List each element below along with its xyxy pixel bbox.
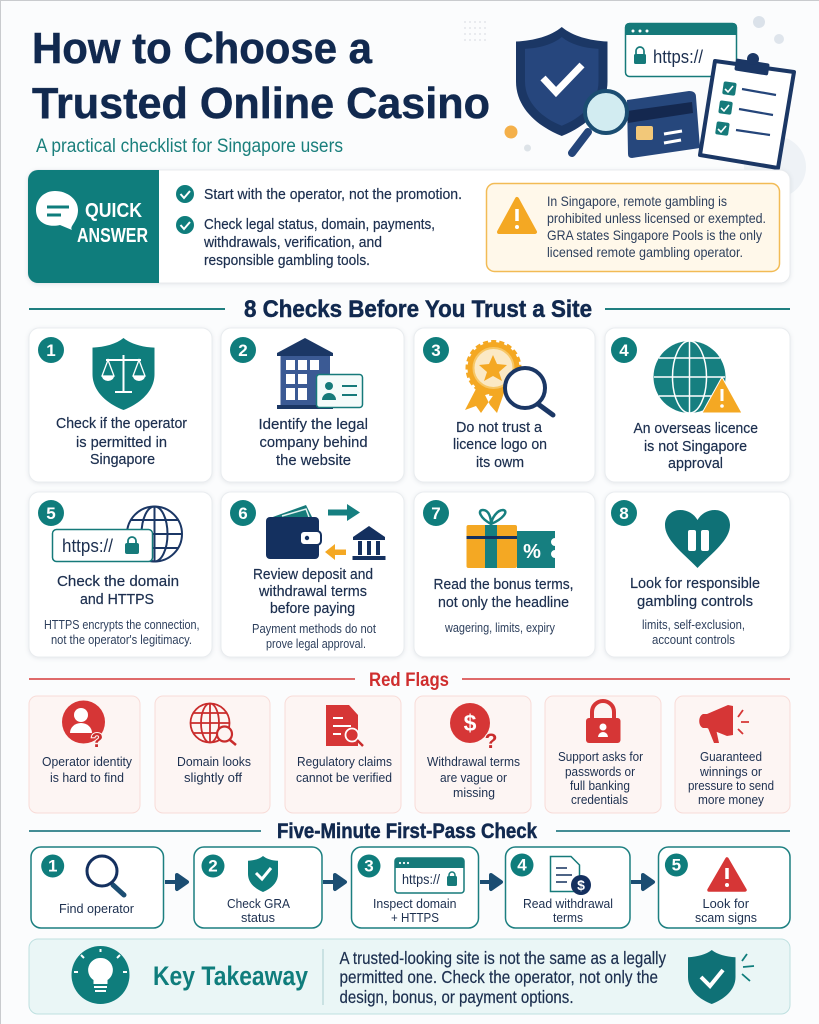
- panel: flag regulatory claims: Regulatory claims: [297, 754, 392, 769]
- panel: check 4: is not Singapore: [644, 438, 747, 455]
- step 2: check GRA status: status: [241, 910, 275, 925]
- step 4: read withdrawal terms: 4: [517, 856, 527, 874]
- panel: check 6: [221, 492, 404, 657]
- panel: flag support asks: [545, 696, 661, 813]
- icon: heart with pause: [665, 510, 730, 568]
- arrow 2: [323, 875, 345, 889]
- panel: quick answer: [28, 170, 790, 283]
- icon: person question: ?: [91, 730, 103, 752]
- panel: check 3: [414, 328, 595, 482]
- icon: rosette and magnifier: [465, 342, 553, 415]
- panel: check 5: HTTPS encrypts the connection,: [44, 618, 200, 632]
- panel: check 3: its owm: [476, 454, 524, 471]
- panel: flag domain: slightly off: [184, 770, 242, 785]
- checklist: withdrawals, verification, and: [203, 234, 382, 251]
- badge 7: 7: [431, 504, 441, 523]
- panel: check 1: is permitted in: [76, 434, 167, 451]
- panel: flag withdrawal terms: are vague or: [440, 770, 508, 785]
- panel: check 8: account controls: [652, 633, 735, 647]
- icon: padlock: [586, 701, 620, 743]
- panel: check 8: [605, 492, 790, 657]
- icon: building and ID card: [277, 338, 362, 409]
- key takeaway heading: Key Takeaway: [153, 961, 308, 991]
- panel: check 5: Check the domain: [57, 573, 179, 590]
- icon: megaphone: [699, 705, 749, 743]
- panel: check 1: Singapore: [90, 451, 155, 468]
- badge 2: 2: [238, 341, 248, 360]
- callout: legal warning: [486, 184, 780, 272]
- checklist: responsible gambling tools.: [204, 252, 370, 269]
- panel: check 7: not only the headline: [438, 594, 569, 611]
- step 5: scam signs: Look for: [702, 896, 750, 911]
- panel: flag support asks: full banking: [570, 778, 630, 793]
- panel: check 2: the website: [276, 452, 351, 469]
- panel: flag operator identity: Operator identity: [42, 754, 132, 769]
- panel: check 2: Identify the legal: [258, 416, 368, 433]
- badge 1: 1: [46, 341, 56, 360]
- panel: check 7: [414, 492, 595, 657]
- panel: flag withdrawal terms: Withdrawal terms: [427, 754, 520, 769]
- panel: flag withdrawal terms: [415, 696, 531, 813]
- takeaway text: design, bonus, or payment options.: [340, 987, 574, 1007]
- quick answer label: QUICK: [85, 200, 142, 222]
- icon: globe with warning: [654, 341, 742, 413]
- panel: check 6: Review deposit and: [253, 566, 373, 583]
- icon: shield with check: [516, 27, 608, 136]
- title: How to Choose a: [32, 24, 372, 73]
- checklist: Check legal status, domain, payments,: [204, 216, 435, 233]
- panel: flag guaranteed winnings: winnings or: [699, 764, 763, 779]
- icon: clipboard checklist: [700, 53, 794, 168]
- icon: shield check: [248, 856, 278, 892]
- panel: flag support asks: Support asks for: [558, 749, 644, 764]
- panel: check 2: company behind: [260, 434, 368, 451]
- badge 5: 5: [46, 504, 56, 523]
- badge 8: [611, 500, 637, 526]
- badge 5: [38, 500, 64, 526]
- step 3: inspect domain: 3: [364, 856, 374, 876]
- icon: https box and globe: https://: [62, 536, 113, 556]
- icon: dollar question: ?: [485, 730, 497, 753]
- panel: flag regulatory claims: cannot be verified: [296, 770, 392, 785]
- step 3: inspect domain: + HTTPS: [391, 910, 439, 925]
- heading: red flags: Red Flags: [369, 670, 449, 691]
- heading: 8 checks: 8 Checks Before You Trust a Site: [244, 296, 592, 323]
- arrow 1: [165, 875, 187, 889]
- icon: dollar question: [450, 703, 497, 753]
- panel: flag domain: [155, 696, 270, 813]
- panel: flag operator identity: [29, 696, 140, 813]
- badge 3: 3: [431, 341, 441, 360]
- step 2: check GRA status: [194, 847, 322, 928]
- badge 4: [611, 337, 637, 363]
- step 1: find operator: Find operator: [59, 901, 135, 916]
- badge 8: 8: [619, 504, 629, 523]
- takeaway text: A trusted-looking site is not the same as a legally: [340, 948, 666, 968]
- panel: check 5: not the operator's legitimacy.: [51, 633, 192, 647]
- icon: red warning triangle: [709, 859, 745, 890]
- panel: check 3: licence logo on: [453, 436, 547, 453]
- icon: lightbulb: [72, 946, 130, 1004]
- icon: wallet and bank transfer: [266, 504, 386, 560]
- step 3: inspect domain: [352, 847, 478, 928]
- callout: legal warning: In Singapore, remote gambling is: [547, 193, 727, 209]
- step 5: scam signs: 5: [672, 856, 681, 874]
- icon: credit card: [627, 91, 700, 158]
- quick answer label: ANSWER: [77, 225, 148, 247]
- checklist: [176, 185, 462, 269]
- panel: check 2: [221, 328, 404, 482]
- icon: dollar question: $: [464, 710, 477, 736]
- panel: flag regulatory claims: [285, 696, 401, 813]
- step 2: check GRA status: 2: [208, 856, 218, 876]
- callout: legal warning: prohibited unless licensed or exempted.: [547, 210, 766, 226]
- panel: check 8: Look for responsible: [630, 575, 760, 592]
- title: Trusted Online Casino: [32, 79, 490, 128]
- panel: check 5: [29, 492, 212, 657]
- panel: check 1: Check if the operator: [56, 415, 187, 432]
- badge 3: [423, 337, 449, 363]
- icon: browser https: https://: [402, 871, 440, 887]
- step 4: read withdrawal terms: terms: [553, 910, 583, 925]
- badge 6: 6: [238, 504, 248, 523]
- step 1: find operator: [31, 847, 164, 928]
- takeaway text: permitted one. Check the operator, not only the: [340, 967, 658, 987]
- step 5: scam signs: scam signs: [695, 910, 757, 925]
- arrow 3: [480, 875, 501, 889]
- panel: check 6: prove legal approval.: [266, 637, 366, 651]
- panel: flag operator identity: is hard to find: [50, 770, 124, 785]
- panel: flag support asks: passwords or: [565, 764, 636, 779]
- panel: check 4: approval: [668, 455, 723, 472]
- panel: flag withdrawal terms: missing: [453, 785, 495, 800]
- takeaway text: [340, 948, 666, 1007]
- heading: five-minute check: Five-Minute First-Pass Check: [277, 820, 537, 843]
- icon: magnifier: [87, 856, 124, 895]
- icon: globe magnifier: [190, 703, 236, 745]
- panel: flag guaranteed winnings: pressure to send: [688, 778, 774, 793]
- icon: document dollar: $: [577, 877, 585, 893]
- icon: gift and coupon: %: [523, 541, 541, 563]
- badge 6: [230, 500, 256, 526]
- panel: check 7: wagering, limits, expiry: [444, 621, 556, 635]
- panel: check 6: withdrawal terms: [258, 583, 367, 600]
- panel: flag support asks: credentials: [571, 792, 628, 807]
- panel: flag guaranteed winnings: more money: [698, 792, 764, 807]
- icon: browser https: https://: [653, 47, 703, 67]
- callout: legal warning: GRA states Singapore Pools is the only: [547, 227, 762, 243]
- icon: https box and globe: [52, 506, 182, 562]
- checklist: Start with the operator, not the promotion.: [204, 186, 462, 203]
- step 1: find operator: 1: [48, 856, 57, 876]
- icon: gift and coupon: [466, 510, 555, 568]
- panel: key takeaway: [29, 939, 790, 1014]
- header illustration: [464, 16, 806, 198]
- step 4: read withdrawal terms: [506, 847, 630, 928]
- icon: speech bubble: [36, 191, 78, 230]
- icon: shield check: [688, 950, 754, 1004]
- icon: document magnifier: [326, 705, 363, 746]
- quick answer label: [28, 170, 159, 283]
- icon: warning triangle: [499, 199, 535, 232]
- callout: legal warning: licensed remote gambling operator.: [547, 244, 743, 260]
- arrow 4: [631, 875, 653, 889]
- panel: check 3: Do not trust a: [456, 419, 543, 436]
- step 4: read withdrawal terms: Read withdrawal: [523, 896, 613, 911]
- step 5: scam signs: [658, 847, 790, 928]
- title: [32, 24, 490, 128]
- panel: check 1: [29, 328, 212, 482]
- badge 4: 4: [619, 341, 629, 360]
- panel: check 4: [605, 328, 790, 482]
- panel: check 4: An overseas licence: [634, 420, 758, 437]
- panel: check 8: gambling controls: [637, 593, 753, 610]
- step 2: check GRA status: Check GRA: [227, 896, 290, 911]
- panel: check 7: Read the bonus terms,: [434, 576, 574, 593]
- icon: magnifier: [572, 91, 627, 153]
- badge 1: [38, 337, 64, 363]
- panel: check 6: Payment methods do not: [252, 622, 376, 636]
- step 3: inspect domain: Inspect domain: [373, 896, 456, 911]
- panel: flag guaranteed winnings: [675, 696, 790, 813]
- panel: check 5: and HTTPS: [80, 591, 154, 608]
- icon: shield with scales: [92, 338, 154, 410]
- badge 2: [230, 337, 256, 363]
- panel: check 6: before paying: [270, 600, 355, 617]
- panel: flag guaranteed winnings: Guaranteed: [700, 749, 762, 764]
- panel: flag domain: Domain looks: [177, 754, 251, 769]
- badge 7: [423, 500, 449, 526]
- subtitle: A practical checklist for Singapore users: [36, 136, 343, 157]
- icon: browser https: [625, 23, 737, 76]
- panel: check 8: limits, self-exclusion,: [642, 618, 745, 632]
